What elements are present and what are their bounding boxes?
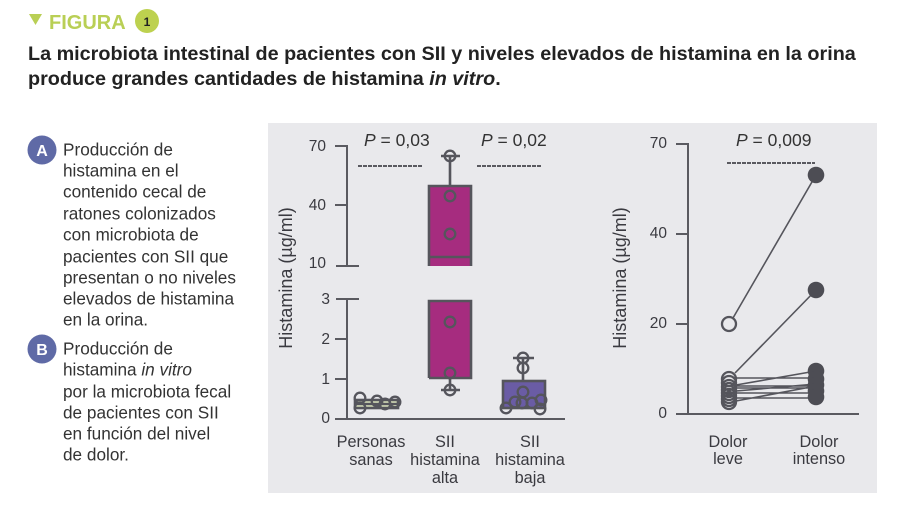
panel B description: B — [36, 342, 48, 359]
y axis label B: Histamina (µg/ml) — [610, 207, 630, 349]
figure label — [29, 9, 159, 34]
filled circles: dolor intenso — [808, 167, 824, 405]
paired lines — [733, 175, 816, 401]
p value B — [727, 130, 815, 163]
panel A description: en la orina. — [63, 310, 148, 330]
p values A — [358, 130, 547, 166]
figure label: 1 — [144, 15, 151, 29]
figure label: FIGURA — [49, 12, 126, 34]
title — [28, 43, 857, 90]
box: SII histamina baja — [501, 353, 546, 414]
panel B description: de dolor. — [63, 444, 129, 464]
category labels A: Personas — [337, 433, 405, 451]
axes A: 70 — [309, 138, 326, 155]
title: La microbiota intestinal de pacientes con SII y niveles elevados de histamina en la orina — [28, 43, 857, 65]
p values A: P = 0,03 — [364, 130, 430, 150]
category labels B: Dolor — [709, 433, 748, 451]
panel A description: elevados de histamina — [63, 288, 234, 308]
panel A description: con microbiota de — [63, 224, 199, 244]
box: personas sanas — [355, 393, 400, 413]
panel B description: de pacientes con SII — [63, 402, 219, 422]
panel B description — [28, 334, 231, 464]
box: SII histamina alta — [429, 151, 471, 395]
axes B: 0 — [658, 405, 667, 422]
axes A: 3 — [321, 291, 330, 308]
category labels A: SII — [520, 433, 540, 451]
category labels B — [709, 433, 845, 468]
panel A description — [28, 136, 236, 330]
p values A: P = 0,02 — [481, 130, 547, 150]
box plot chart A — [276, 130, 566, 487]
panel A description: ratones colonizados — [63, 204, 216, 224]
axes A — [309, 138, 565, 427]
category labels A: histamina — [495, 451, 566, 469]
open circles: dolor leve — [722, 317, 736, 409]
panel B description: histamina in vitro — [63, 360, 192, 380]
axes B: 20 — [650, 315, 667, 332]
category labels B: intenso — [793, 450, 845, 468]
category labels B: Dolor — [800, 433, 839, 451]
category labels A: SII — [435, 433, 455, 451]
category labels B: leve — [713, 450, 743, 468]
axes A: 2 — [321, 331, 330, 348]
title: produce grandes cantidades de histamina in vitro. — [28, 68, 501, 90]
axes A: 40 — [309, 197, 326, 214]
panel A description: Producción de — [63, 140, 173, 160]
category labels A: alta — [432, 469, 459, 487]
axes A: 0 — [321, 410, 330, 427]
y axis label A: Histamina (µg/ml) — [276, 207, 296, 349]
panel A description: A — [36, 143, 48, 160]
gray chart panel — [268, 123, 877, 493]
axes A: 10 — [309, 255, 326, 272]
panel B description: por la microbiota fecal — [63, 382, 231, 402]
axes B: 70 — [650, 135, 667, 152]
category labels A: baja — [515, 469, 546, 487]
category labels A: sanas — [349, 451, 393, 469]
axes B — [650, 135, 859, 422]
category labels A: histamina — [410, 451, 481, 469]
panel A description: pacientes con SII que — [63, 246, 228, 266]
paired chart B — [610, 130, 859, 468]
category labels A — [337, 433, 566, 487]
panel B description: Producción de — [63, 338, 173, 358]
axes A: 1 — [321, 371, 330, 388]
axes B: 40 — [650, 225, 667, 242]
panel A description: contenido cecal de — [63, 182, 206, 202]
panel B description: en función del nivel — [63, 424, 210, 444]
panel A description: histamina en el — [63, 160, 179, 180]
p value B: P = 0,009 — [736, 130, 811, 150]
panel A description: presentan o no niveles — [63, 268, 236, 288]
